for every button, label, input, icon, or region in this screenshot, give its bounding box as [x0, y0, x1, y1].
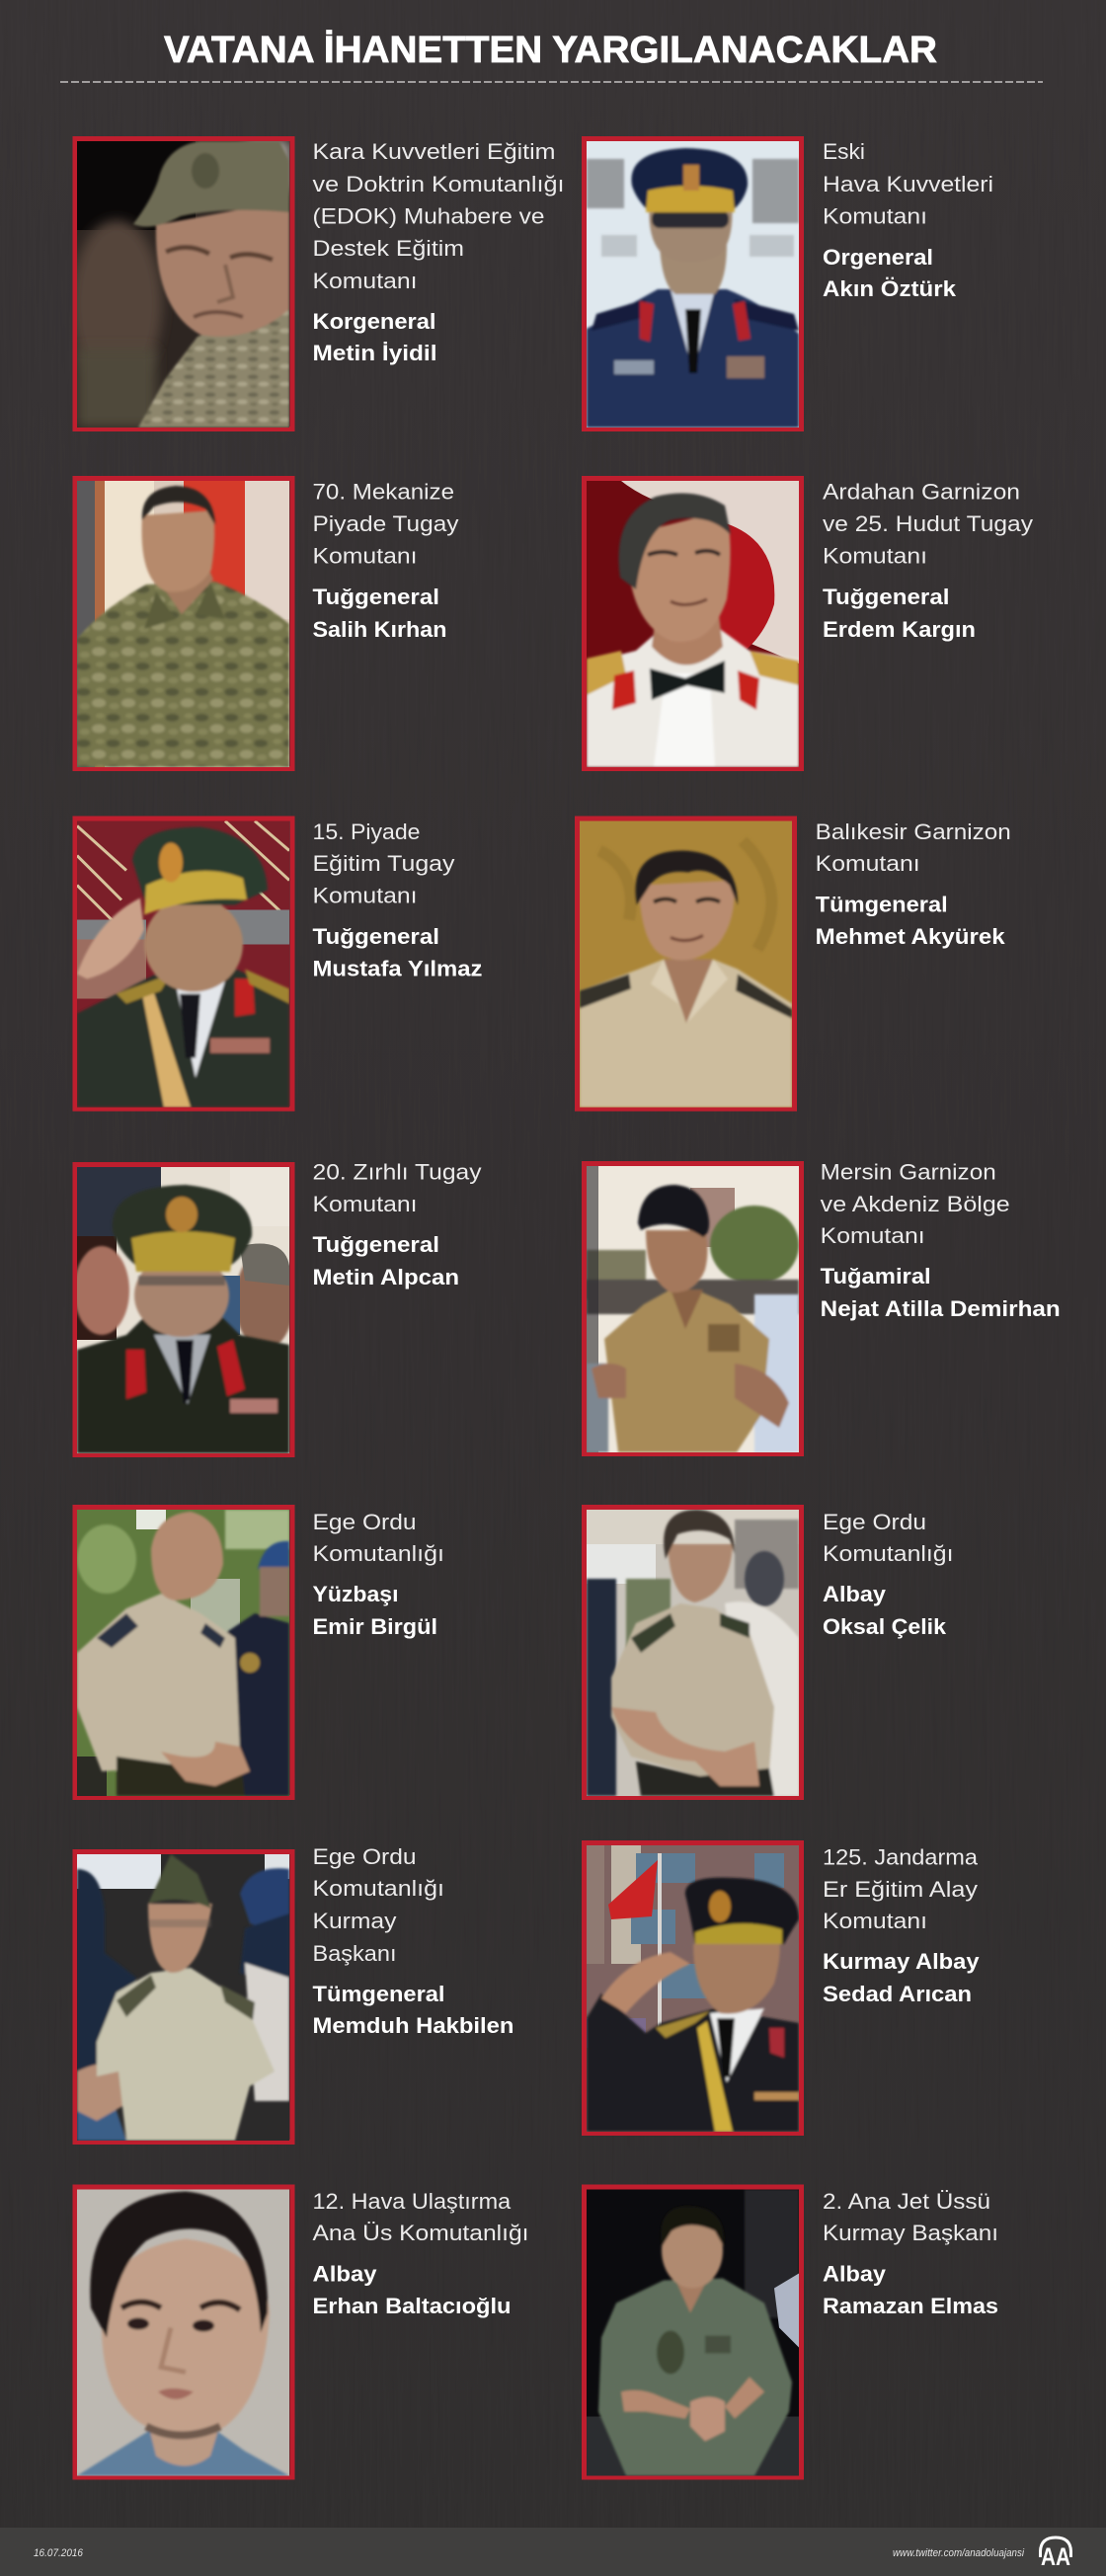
card: Akın Öztürk: [585, 138, 993, 429]
footer url: www.twitter.com/anadoluajansi: [893, 2547, 1024, 2559]
text: Metin Alpcan: [312, 1160, 482, 1289]
text: Metin İyidil: (EDOK) Muhabere ve: [312, 203, 545, 229]
text: Emir Birgül: Komutanlığı: [312, 1541, 444, 1566]
text: Ramazan Elmas: Kurmay Başkanı: [823, 2221, 998, 2245]
text: Metin İyidil: Metin İyidil: [312, 341, 436, 365]
photo: Erhan Baltacıoğlu: [75, 2187, 292, 2477]
text: Erdem Kargın: [823, 480, 1034, 642]
text: Metin Alpcan: Tuğgeneral: [312, 1232, 439, 1257]
text: Salih Kırhan: Piyade Tugay: [312, 511, 459, 536]
photo: Mustafa Yılmaz: [75, 819, 292, 1109]
card: Salih Kırhan: [75, 478, 459, 768]
text: Emir Birgül: [312, 1510, 444, 1639]
text: Erdem Kargın: Tuğgeneral: [823, 585, 950, 609]
text: Salih Kırhan: Salih Kırhan: [312, 617, 446, 642]
text: Memduh Hakbilen: Başkanı: [312, 1941, 397, 1966]
photo: Ramazan Elmas: [585, 2187, 802, 2477]
text: Sedad Arıcan: Er Eğitim Alay: [823, 1877, 979, 1902]
text: Akın Öztürk: Komutanı: [823, 203, 927, 229]
text: Ramazan Elmas: Albay: [823, 2261, 887, 2287]
text: Akın Öztürk: [823, 139, 993, 301]
text: Salih Kırhan: 70. Mekanize: [312, 480, 454, 505]
card: Metin Alpcan: [74, 1160, 482, 1455]
text: Memduh Hakbilen: Tümgeneral: [312, 1982, 444, 2006]
text: Nejat Atilla Demirhan: Komutanı: [821, 1223, 925, 1248]
text: Mustafa Yılmaz: Mustafa Yılmaz: [312, 957, 482, 981]
text: Sedad Arıcan: Sedad Arıcan: [823, 1982, 972, 2006]
text: Mustafa Yılmaz: [312, 820, 482, 981]
text: Mustafa Yılmaz: Eğitim Tugay: [312, 851, 455, 876]
text: Mehmet Akyürek: [816, 820, 1011, 949]
text: Mustafa Yılmaz: 15. Piyade: [312, 820, 421, 844]
photo: Sedad Arıcan: [585, 1842, 802, 2133]
text: Metin İyidil: Korgeneral: [312, 309, 436, 334]
text: Sedad Arıcan: Komutanı: [823, 1909, 927, 1933]
text: Metin İyidil: Komutanı: [312, 269, 417, 293]
text: Memduh Hakbilen: [312, 1844, 514, 2038]
text: Memduh Hakbilen: Komutanlığı: [312, 1876, 444, 1901]
text: Ramazan Elmas: Ramazan Elmas: [823, 2294, 998, 2318]
text: Nejat Atilla Demirhan: [821, 1160, 1061, 1321]
text: Metin Alpcan: Komutanı: [312, 1192, 417, 1216]
text: Akın Öztürk: Akın Öztürk: [823, 276, 957, 301]
text: Salih Kırhan: Komutanı: [312, 544, 417, 569]
card: Oksal Çelik: [585, 1507, 954, 1797]
text: Nejat Atilla Demirhan: Nejat Atilla Demirhan: [821, 1296, 1061, 1321]
text: Nejat Atilla Demirhan: Tuğamiral: [821, 1264, 931, 1288]
text: Erdem Kargın: ve 25. Hudut Tugay: [823, 511, 1034, 536]
card: Emir Birgül: [75, 1507, 444, 1797]
text: Metin İyidil: [312, 139, 565, 365]
text: Emir Birgül: Emir Birgül: [312, 1614, 437, 1639]
photo: Emir Birgül: [75, 1507, 292, 1797]
card: Ramazan Elmas: [585, 2187, 998, 2477]
text: Erhan Baltacıoğlu: Albay: [312, 2261, 377, 2287]
text: Emir Birgül: Ege Ordu: [312, 1510, 417, 1534]
photo: Metin İyidil: [71, 138, 292, 429]
text: Memduh Hakbilen: Ege Ordu: [312, 1844, 417, 1869]
text: Salih Kırhan: Tuğgeneral: [312, 585, 439, 609]
photo: Mehmet Akyürek: [577, 819, 794, 1109]
text: Ramazan Elmas: 2. Ana Jet Üssü: [823, 2189, 990, 2214]
text: Erhan Baltacıoğlu: 12. Hava Ulaştırma: [312, 2189, 512, 2214]
text: Nejat Atilla Demirhan: ve Akdeniz Bölge: [821, 1192, 1010, 1216]
photo: Erdem Kargın: [585, 478, 802, 768]
text: Mehmet Akyürek: Mehmet Akyürek: [816, 924, 1006, 949]
text: Sedad Arıcan: [823, 1845, 980, 2006]
text: Salih Kırhan: [312, 480, 459, 642]
footer date: 16.07.2016: [34, 2547, 84, 2559]
text: Metin İyidil: ve Doktrin Komutanlığı: [312, 172, 565, 196]
text: Metin İyidil: Destek Eğitim: [312, 236, 464, 261]
text: Metin İyidil: Kara Kuvvetleri Eğitim: [312, 139, 555, 164]
text: Metin Alpcan: 20. Zırhlı Tugay: [312, 1160, 482, 1185]
text: Erhan Baltacıoğlu: Erhan Baltacıoğlu: [312, 2294, 512, 2318]
text: Erdem Kargın: Ardahan Garnizon: [823, 480, 1020, 505]
card: Erhan Baltacıoğlu: [75, 2187, 529, 2477]
card: Erdem Kargın: [585, 478, 1034, 768]
photo: Memduh Hakbilen: [75, 1852, 292, 2143]
footer: [0, 2528, 1106, 2576]
text: Memduh Hakbilen: Memduh Hakbilen: [312, 2013, 514, 2038]
text: Oksal Çelik: Komutanlığı: [823, 1541, 954, 1566]
text: Erdem Kargın: Komutanı: [823, 544, 927, 569]
card: Sedad Arıcan: [585, 1842, 980, 2133]
text: Oksal Çelik: [823, 1510, 954, 1639]
text: Memduh Hakbilen: Kurmay: [312, 1909, 397, 1933]
text: Mehmet Akyürek: Tümgeneral: [816, 893, 948, 917]
card: Nejat Atilla Demirhan: [585, 1160, 1061, 1453]
text: Akın Öztürk: Hava Kuvvetleri: [823, 172, 993, 196]
card: Mehmet Akyürek: [577, 819, 1011, 1109]
card: Metin İyidil: [71, 138, 565, 429]
photo: Salih Kırhan: [75, 478, 292, 768]
text: Nejat Atilla Demirhan: Mersin Garnizon: [821, 1160, 996, 1185]
text: Oksal Çelik: Albay: [823, 1582, 887, 1606]
text: Mehmet Akyürek: Balıkesir Garnizon: [816, 820, 1011, 844]
text: Akın Öztürk: Eski: [823, 139, 865, 164]
text: Mustafa Yılmaz: Komutanı: [312, 883, 417, 908]
photo: Akın Öztürk: [585, 138, 802, 429]
title: VATANA İHANETTEN YARGILANACAKLAR: [164, 30, 937, 71]
photo: Oksal Çelik: [585, 1507, 802, 1797]
photo: Nejat Atilla Demirhan: [585, 1163, 802, 1453]
text: Erdem Kargın: Erdem Kargın: [823, 617, 976, 642]
text: Erhan Baltacıoğlu: [312, 2189, 529, 2318]
text: Erhan Baltacıoğlu: Ana Üs Komutanlığı: [312, 2221, 529, 2245]
text: Mehmet Akyürek: Komutanı: [816, 851, 920, 876]
text: Oksal Çelik: Oksal Çelik: [823, 1614, 947, 1639]
text: Akın Öztürk: Orgeneral: [823, 245, 933, 270]
text: Sedad Arıcan: 125. Jandarma: [823, 1845, 978, 1870]
text: Metin Alpcan: Metin Alpcan: [312, 1265, 459, 1289]
text: Mustafa Yılmaz: Tuğgeneral: [312, 924, 439, 949]
text: Sedad Arıcan: Kurmay Albay: [823, 1949, 980, 1974]
text: Oksal Çelik: Ege Ordu: [823, 1510, 926, 1534]
text: Ramazan Elmas: [823, 2189, 998, 2318]
text: Emir Birgül: Yüzbaşı: [312, 1582, 399, 1606]
photo: Metin Alpcan: [74, 1165, 294, 1455]
card: Mustafa Yılmaz: [75, 819, 482, 1109]
icon: AA logo: AA: [1041, 2543, 1070, 2571]
card: Memduh Hakbilen: [75, 1844, 514, 2143]
